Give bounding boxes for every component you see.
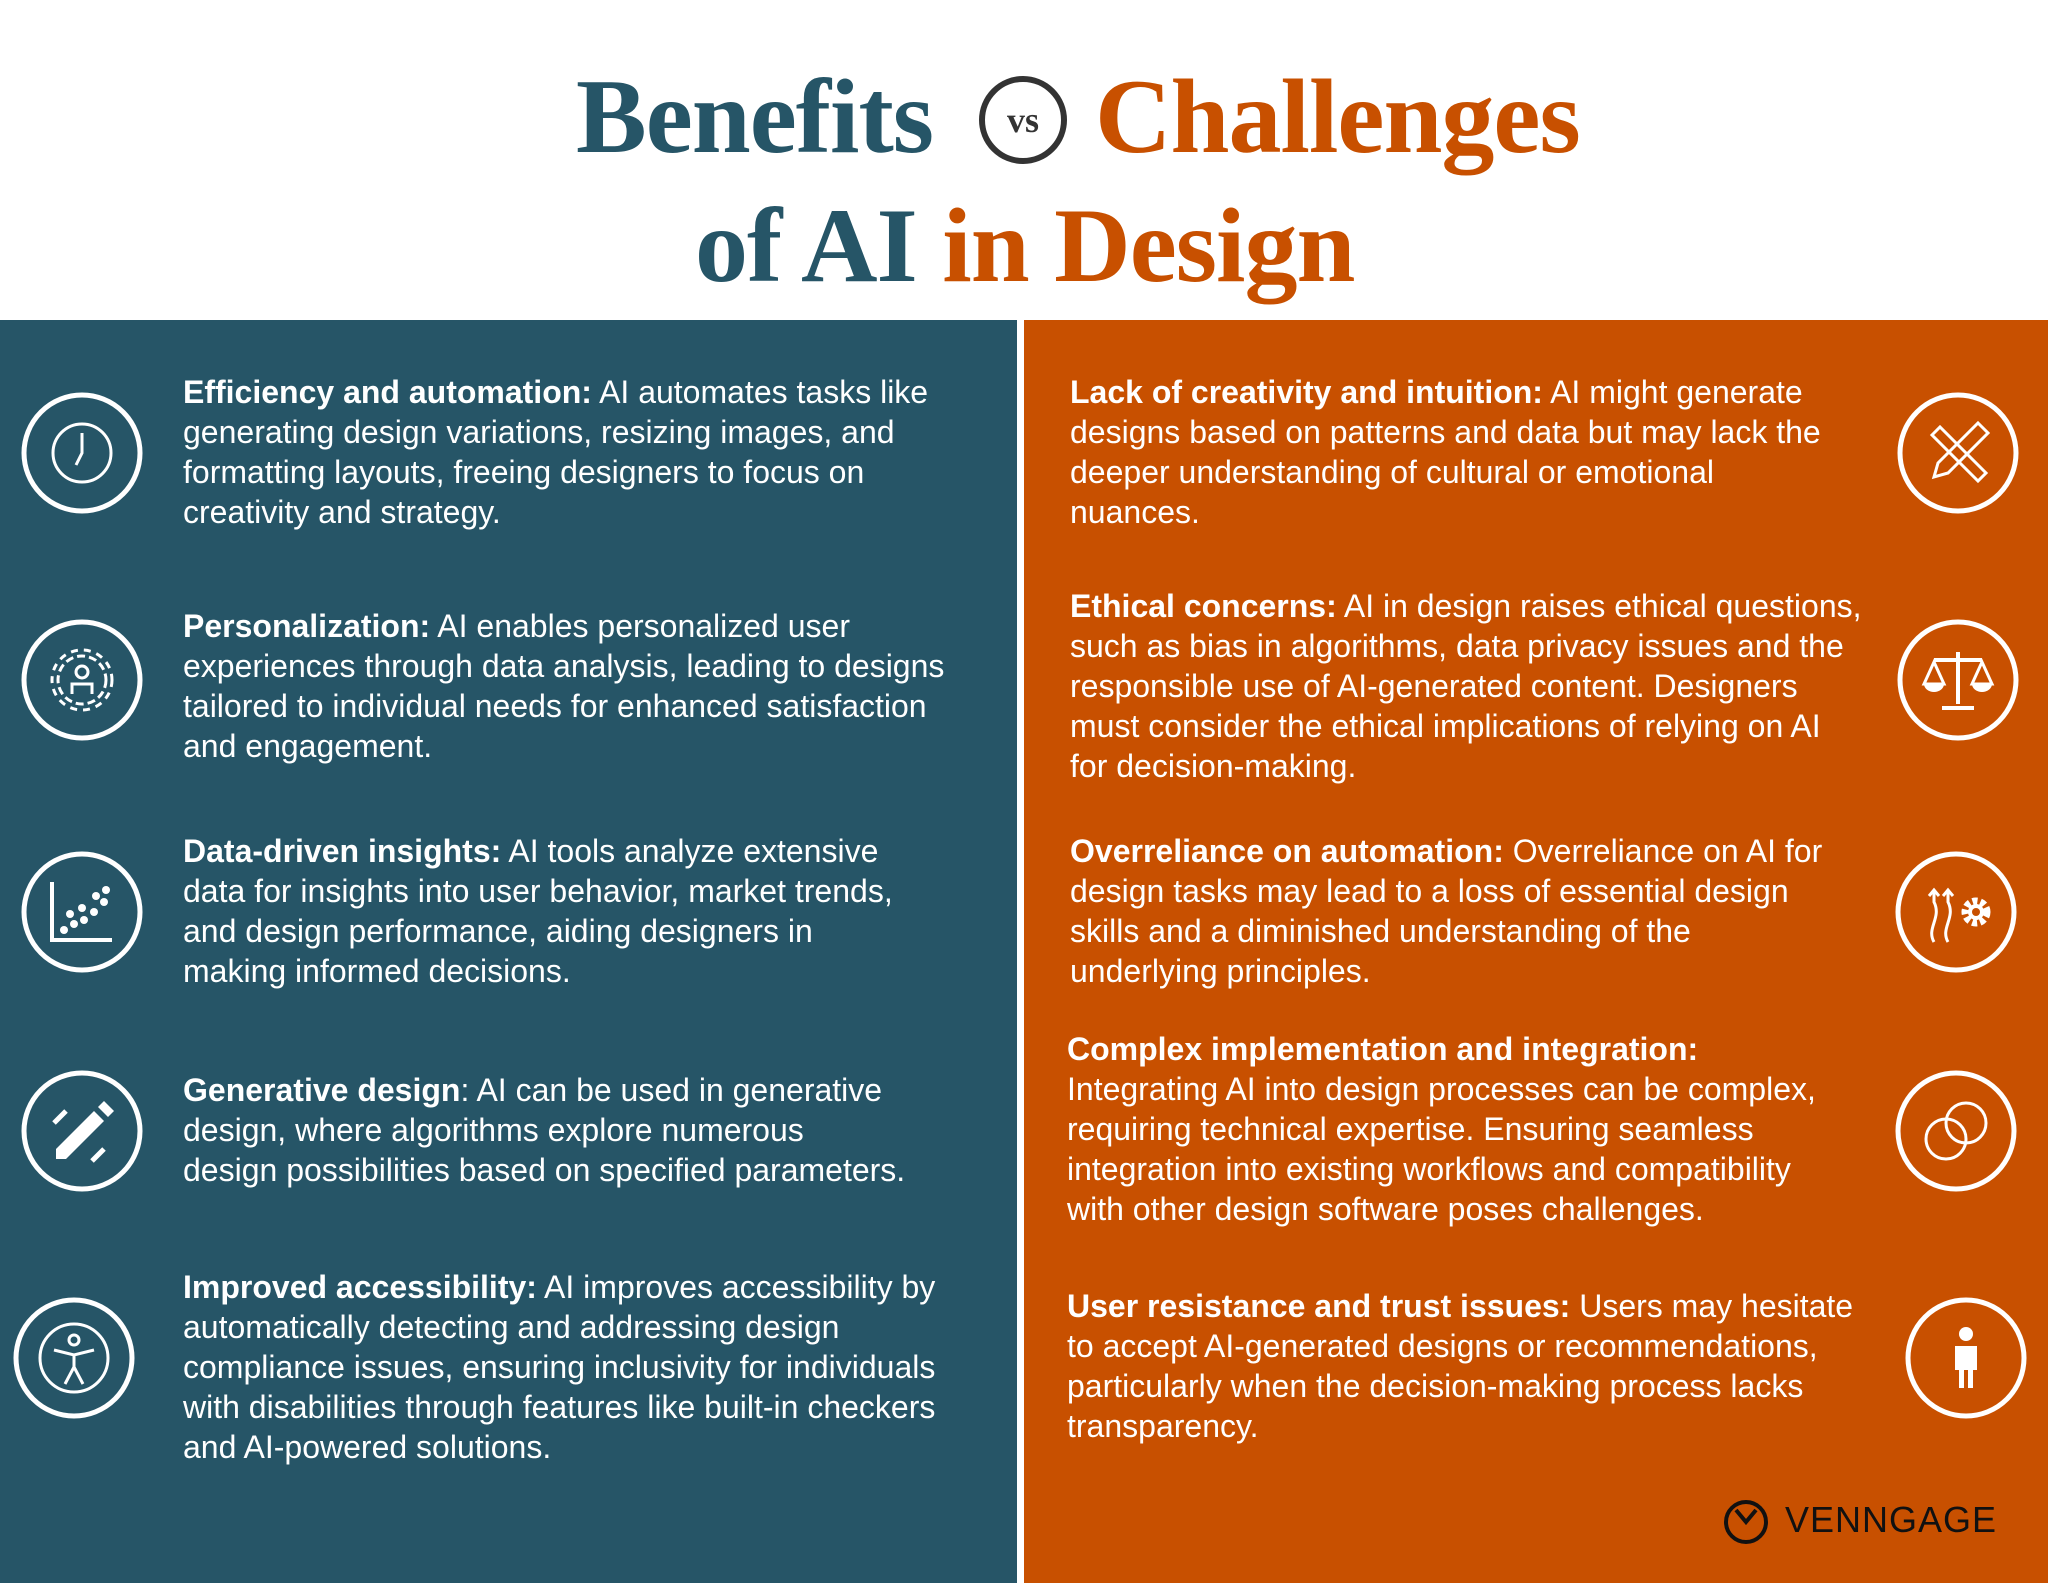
benefit 5: automatically detecting and addressing design	[183, 1309, 839, 1345]
challenge 2: for decision-making.	[1070, 748, 1356, 784]
icon: person	[1906, 1298, 2026, 1418]
benefit 2: Personalization: AI enables personalized user	[183, 608, 850, 644]
benefit 4: Generative design: AI can be used in generative	[183, 1072, 882, 1108]
challenge 3: skills and a diminished understanding of the	[1070, 913, 1691, 949]
panel: benefits	[0, 320, 1017, 1583]
challenge 5	[1067, 1288, 1853, 1444]
benefit 4	[183, 1072, 905, 1188]
logo: venngage: VENNGAGE	[1785, 1499, 1997, 1540]
benefit 5	[183, 1269, 936, 1465]
benefit 5: Improved accessibility: AI improves accessibility by	[183, 1269, 935, 1305]
challenge 3: design tasks may lead to a loss of essential design	[1070, 873, 1789, 909]
challenge 3	[1070, 833, 1822, 989]
challenge 5: to accept AI-generated designs or recommendations,	[1067, 1328, 1818, 1364]
challenge 2: must consider the ethical implications of relying on AI	[1070, 708, 1821, 744]
challenge 4: requiring technical expertise. Ensuring seamless	[1067, 1111, 1754, 1147]
challenge 2: responsible use of AI-generated content. Designers	[1070, 668, 1798, 704]
challenge 5: transparency.	[1067, 1408, 1258, 1444]
challenge 4	[1067, 1031, 1816, 1227]
challenge 5: particularly when the decision-making process lacks	[1067, 1368, 1803, 1404]
challenge 1: deeper understanding of cultural or emotional	[1070, 454, 1714, 490]
challenge 4: Complex implementation and integration:	[1067, 1031, 1698, 1067]
icon: vs circle: vs	[1007, 100, 1039, 140]
benefit 1: generating design variations, resizing images, and	[183, 414, 895, 450]
benefit 5: and AI-powered solutions.	[183, 1429, 551, 1465]
title line 2: of AI in Design	[695, 187, 1354, 304]
challenge 1: nuances.	[1070, 494, 1200, 530]
challenge 3: underlying principles.	[1070, 953, 1371, 989]
benefit 4: design possibilities based on specified parameters.	[183, 1152, 905, 1188]
benefit 3	[183, 833, 893, 989]
benefit 2: tailored to individual needs for enhanced satisfaction	[183, 688, 927, 724]
benefit 3: data for insights into user behavior, market trends,	[183, 873, 893, 909]
icon: arrows gear	[1896, 852, 2016, 972]
icon: clock	[22, 392, 142, 514]
benefit 1: Efficiency and automation: AI automates tasks like	[183, 374, 928, 410]
challenge 2	[1070, 588, 1862, 784]
benefit 2: experiences through data analysis, leading to designs	[183, 648, 944, 684]
challenge 2: such as bias in algorithms, data privacy issues and the	[1070, 628, 1844, 664]
icon: scales	[1898, 620, 2018, 740]
benefit 4: design, where algorithms explore numerous	[183, 1112, 804, 1148]
benefit 5: with disabilities through features like built-in checkers	[183, 1389, 935, 1425]
challenge 4: with other design software poses challenges.	[1067, 1191, 1704, 1227]
benefit 5: compliance issues, ensuring inclusivity for individuals	[183, 1349, 935, 1385]
icon: overlapping circles	[1896, 1070, 2016, 1192]
challenge 5: User resistance and trust issues: Users may hesitate	[1067, 1288, 1853, 1324]
icon: accessibility	[14, 1298, 134, 1418]
benefit 2	[183, 608, 944, 764]
title line 1 benefits: Benefits	[576, 58, 933, 175]
benefit 3: Data-driven insights: AI tools analyze extensive	[183, 833, 878, 869]
title	[576, 58, 1580, 304]
icon: gear person	[22, 620, 142, 740]
challenge 2: Ethical concerns: AI in design raises ethical questions,	[1070, 588, 1862, 624]
challenge 3: Overreliance on automation: Overreliance on AI for	[1070, 833, 1822, 869]
benefit 1: creativity and strategy.	[183, 494, 501, 530]
challenge 4: Integrating AI into design processes can be complex,	[1067, 1071, 1816, 1107]
challenge 4: integration into existing workflows and compatibility	[1067, 1151, 1791, 1187]
benefit 1: formatting layouts, freeing designers to focus on	[183, 454, 864, 490]
benefit 3: making informed decisions.	[183, 953, 571, 989]
challenge 1: designs based on patterns and data but may lack the	[1070, 414, 1821, 450]
icon: pencil	[22, 1070, 142, 1192]
icon: scatter chart	[22, 852, 142, 972]
challenge 1: Lack of creativity and intuition: AI might generate	[1070, 374, 1803, 410]
benefit 3: and design performance, aiding designers in	[183, 913, 813, 949]
icon: ruler pencil cross	[1898, 392, 2018, 514]
panel: challenges	[1024, 320, 2048, 1583]
challenge 1	[1070, 374, 1821, 530]
benefit 1	[183, 374, 928, 530]
benefit 2: and engagement.	[183, 728, 432, 764]
icon: vs circle	[979, 76, 1067, 164]
title line 1 challenges: Challenges	[1095, 58, 1580, 175]
